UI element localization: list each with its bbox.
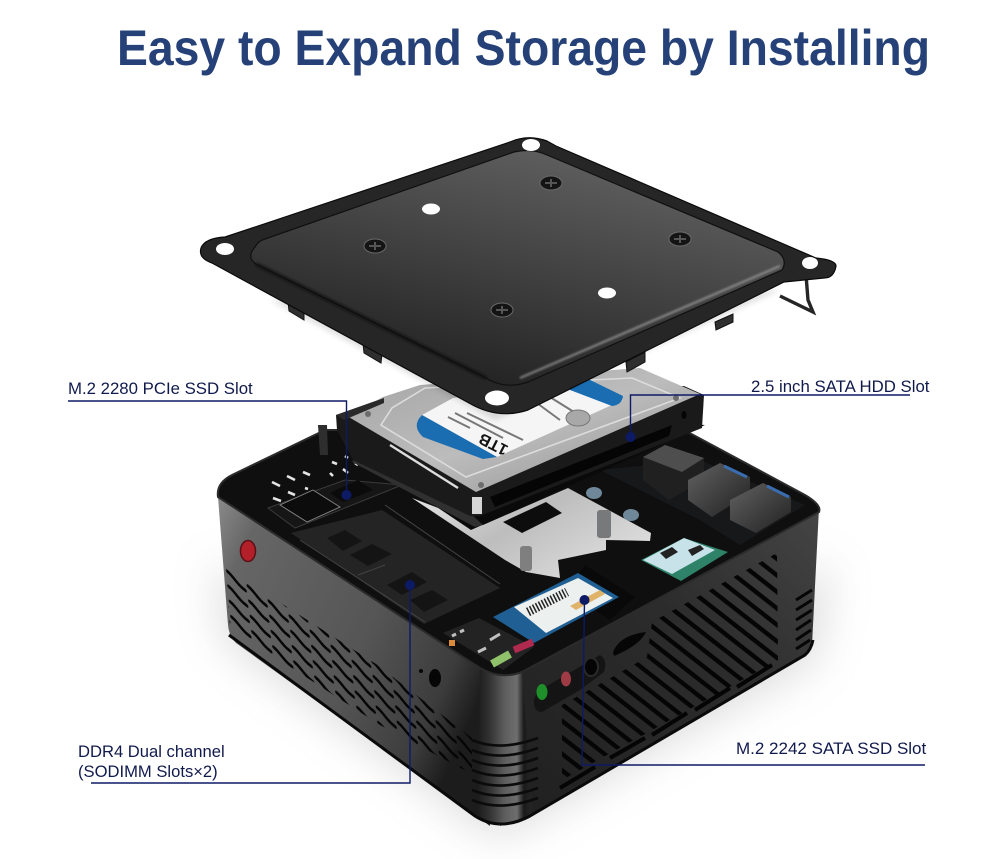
capacitors <box>586 487 602 499</box>
barcode <box>528 592 567 612</box>
small side hole <box>419 669 423 673</box>
M.2 2242 slot <box>565 565 635 620</box>
HDD screw 3 <box>673 395 679 401</box>
M.2 2280 SSD board <box>268 480 402 528</box>
plate shadow <box>270 290 780 420</box>
callout: M.2 2280 PCIe SSD Slot: M.2 2280 PCIe SSD Slot <box>68 379 253 398</box>
HDD side port hole <box>682 411 686 419</box>
recess lower bevel <box>256 264 486 378</box>
screw 2 <box>364 239 386 253</box>
corner hole right <box>802 257 818 269</box>
brand mark <box>570 590 605 610</box>
ethernet top <box>643 445 704 472</box>
green audio jack <box>536 684 548 700</box>
RAM chips <box>327 530 448 612</box>
HDD label print <box>448 394 574 440</box>
right edge ribs <box>796 590 812 649</box>
M.2 2242 label <box>514 578 613 633</box>
callout: M.2 2280 PCIe SSD Slot <box>68 379 352 500</box>
callout: M.2 2242 SATA SSD Slot <box>580 595 927 765</box>
M.2 2280 SSD controller <box>330 480 373 502</box>
tray shadow <box>352 420 705 530</box>
capacitor 2 <box>623 509 639 521</box>
HDD capacity label: 1TB <box>476 429 511 458</box>
caddy frame <box>336 386 704 516</box>
main board right <box>600 460 805 545</box>
left face vents <box>226 569 472 770</box>
interior components <box>268 425 805 670</box>
hard drive assembly <box>336 368 705 530</box>
shadow under mini PC <box>215 560 830 838</box>
front corner column <box>478 668 532 824</box>
lower vent dashes <box>560 665 772 788</box>
red audio jack <box>561 672 571 686</box>
USB port 2 <box>730 483 791 533</box>
mini PC case <box>215 430 819 826</box>
HDD screw 1 <box>365 411 371 417</box>
callout: 2.5 inch SATA HDD Slot: 2.5 inch SATA HDD Slot <box>751 377 930 396</box>
corner hole top <box>522 139 540 151</box>
plate tabs <box>288 302 733 372</box>
rear standoff <box>318 425 328 455</box>
HDD blue band left <box>417 415 497 459</box>
HDD blue band right <box>570 375 623 406</box>
HDD recess line <box>381 378 680 477</box>
mounting hole 2 <box>598 288 616 298</box>
SD card slot <box>613 632 646 656</box>
mounting hole 1 <box>422 204 440 214</box>
caddy corner bracket <box>336 398 384 420</box>
WiFi card <box>641 538 728 581</box>
bottom edge <box>229 635 813 824</box>
recess highlight <box>520 266 780 378</box>
corner ribs <box>472 738 538 806</box>
silver bracket <box>412 488 651 578</box>
caddy side slot <box>490 425 672 507</box>
white rail <box>390 445 458 488</box>
RAM module <box>291 510 500 624</box>
HDD spindle <box>566 410 590 426</box>
side jack left <box>429 669 441 687</box>
PCB white parts <box>452 630 500 652</box>
corner hole left <box>216 243 234 255</box>
M.2 2242 SSD <box>493 573 619 643</box>
bottom plate <box>200 138 836 420</box>
chrome bracket end <box>472 497 482 514</box>
power button <box>240 540 256 562</box>
title: Easy to Expand Storage by Installing <box>117 19 930 76</box>
lower tray edge <box>352 457 483 527</box>
corner hole bottom <box>485 390 509 406</box>
HDD top cover <box>347 368 700 492</box>
callout: M.2 2242 SATA SSD Slot: M.2 2242 SATA SSD Slot <box>736 739 927 758</box>
callout: 2.5 inch SATA HDD Slot <box>626 377 930 442</box>
callout: DDR4 Dual channel: DDR4 Dual channel <box>78 742 225 761</box>
callout: DDR4 Dual channel: (SODIMM Slots×2) <box>78 762 218 781</box>
screw 1 <box>540 176 562 190</box>
line-in jack <box>584 658 598 676</box>
PCB red header <box>514 642 533 650</box>
standoff pillar <box>597 510 611 538</box>
callout: DDR4 Dual channel <box>78 580 415 783</box>
plate recessed face <box>251 151 784 385</box>
header pins <box>272 456 358 501</box>
top rim and interior <box>218 430 819 675</box>
HDD white label <box>422 378 623 457</box>
small colourful PCB <box>443 618 534 670</box>
ethernet port <box>643 445 704 500</box>
WiFi label <box>643 538 715 574</box>
PCB orange part <box>449 640 455 646</box>
RAM details <box>300 505 500 622</box>
right face <box>500 508 819 826</box>
left face <box>218 497 490 826</box>
bracket cutout <box>503 502 562 533</box>
USB port 1 <box>688 463 750 517</box>
right face vents <box>562 554 778 777</box>
screw 3 <box>669 232 691 246</box>
audio panel <box>534 655 605 712</box>
M.2 2280 SSD chip <box>280 490 340 522</box>
HDD screw 2 <box>478 482 484 488</box>
USB blue tongues <box>724 466 789 497</box>
screw 4 <box>491 303 513 317</box>
standoff pillar 2 <box>520 546 532 571</box>
bracket on right corner <box>780 275 813 312</box>
plate rim <box>200 138 836 414</box>
PCB green header <box>492 654 510 664</box>
WiFi QR <box>660 545 704 559</box>
